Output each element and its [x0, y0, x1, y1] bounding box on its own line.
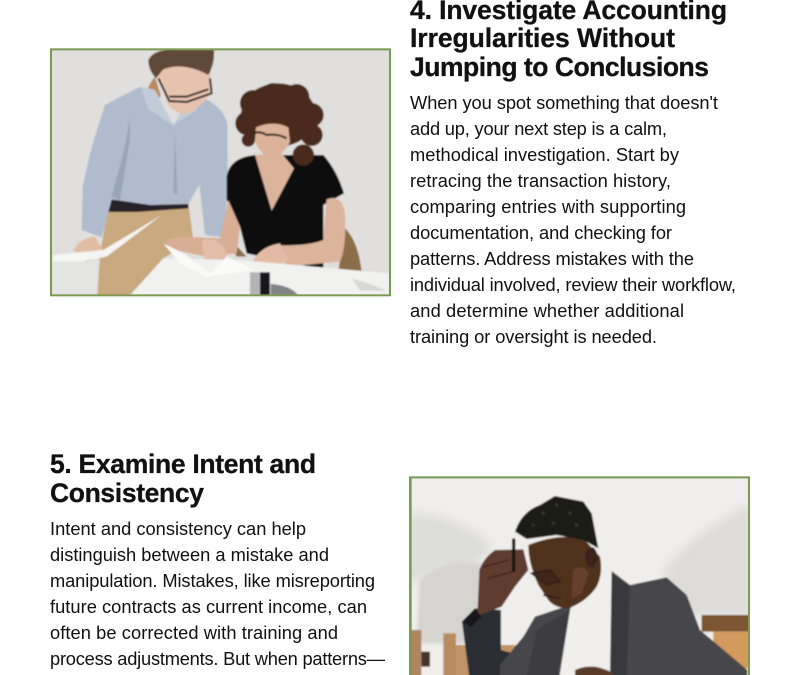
text block: section 5 body: often be corrected with training and — [50, 622, 338, 643]
photo: two colleagues reviewing documents — [50, 48, 391, 296]
text block: section 4 body: documentation, and checking for — [410, 222, 672, 243]
text block: section 4 body: individual involved, review their workflow, — [410, 274, 736, 295]
heading: section 5 — [50, 449, 316, 508]
text block: section 4 body: patterns. Address mistakes with the — [410, 248, 694, 269]
heading: section 4 — [410, 0, 727, 82]
photo: thoughtful man in a suit — [407, 476, 753, 675]
text block: section 5 body: Intent and consistency can help — [50, 518, 306, 539]
text block: section 4 body: comparing entries with supporting — [410, 196, 686, 217]
text block: section 5 body: future contracts as current income, can — [50, 596, 367, 617]
heading: section 4: Irregularities Without — [410, 23, 675, 53]
text block: section 4 body: add up, your next step is a calm, — [410, 118, 667, 139]
text block: section 4 body: When you spot something that doesn't — [410, 92, 718, 113]
heading: section 5: Consistency — [50, 478, 204, 508]
text block: section 5 body: process adjustments. But when patterns— — [50, 648, 386, 669]
text block: section 4 body: methodical investigation. Start by — [410, 144, 680, 165]
heading: section 4: Jumping to Conclusions — [410, 52, 709, 82]
text block: section 4 body: and determine whether additional — [410, 300, 684, 321]
heading: section 5: 5. Examine Intent and — [50, 449, 316, 479]
text block: section 5 body — [50, 518, 386, 669]
text block: section 4 body: retracing the transaction history, — [410, 170, 671, 191]
curls — [235, 83, 324, 166]
text block: section 4 body — [410, 92, 736, 347]
text block: section 5 body: manipulation. Mistakes, like misreporting — [50, 570, 375, 591]
text block: section 4 body: training or oversight is needed. — [410, 326, 657, 347]
text block: section 5 body: distinguish between a mistake and — [50, 544, 329, 565]
